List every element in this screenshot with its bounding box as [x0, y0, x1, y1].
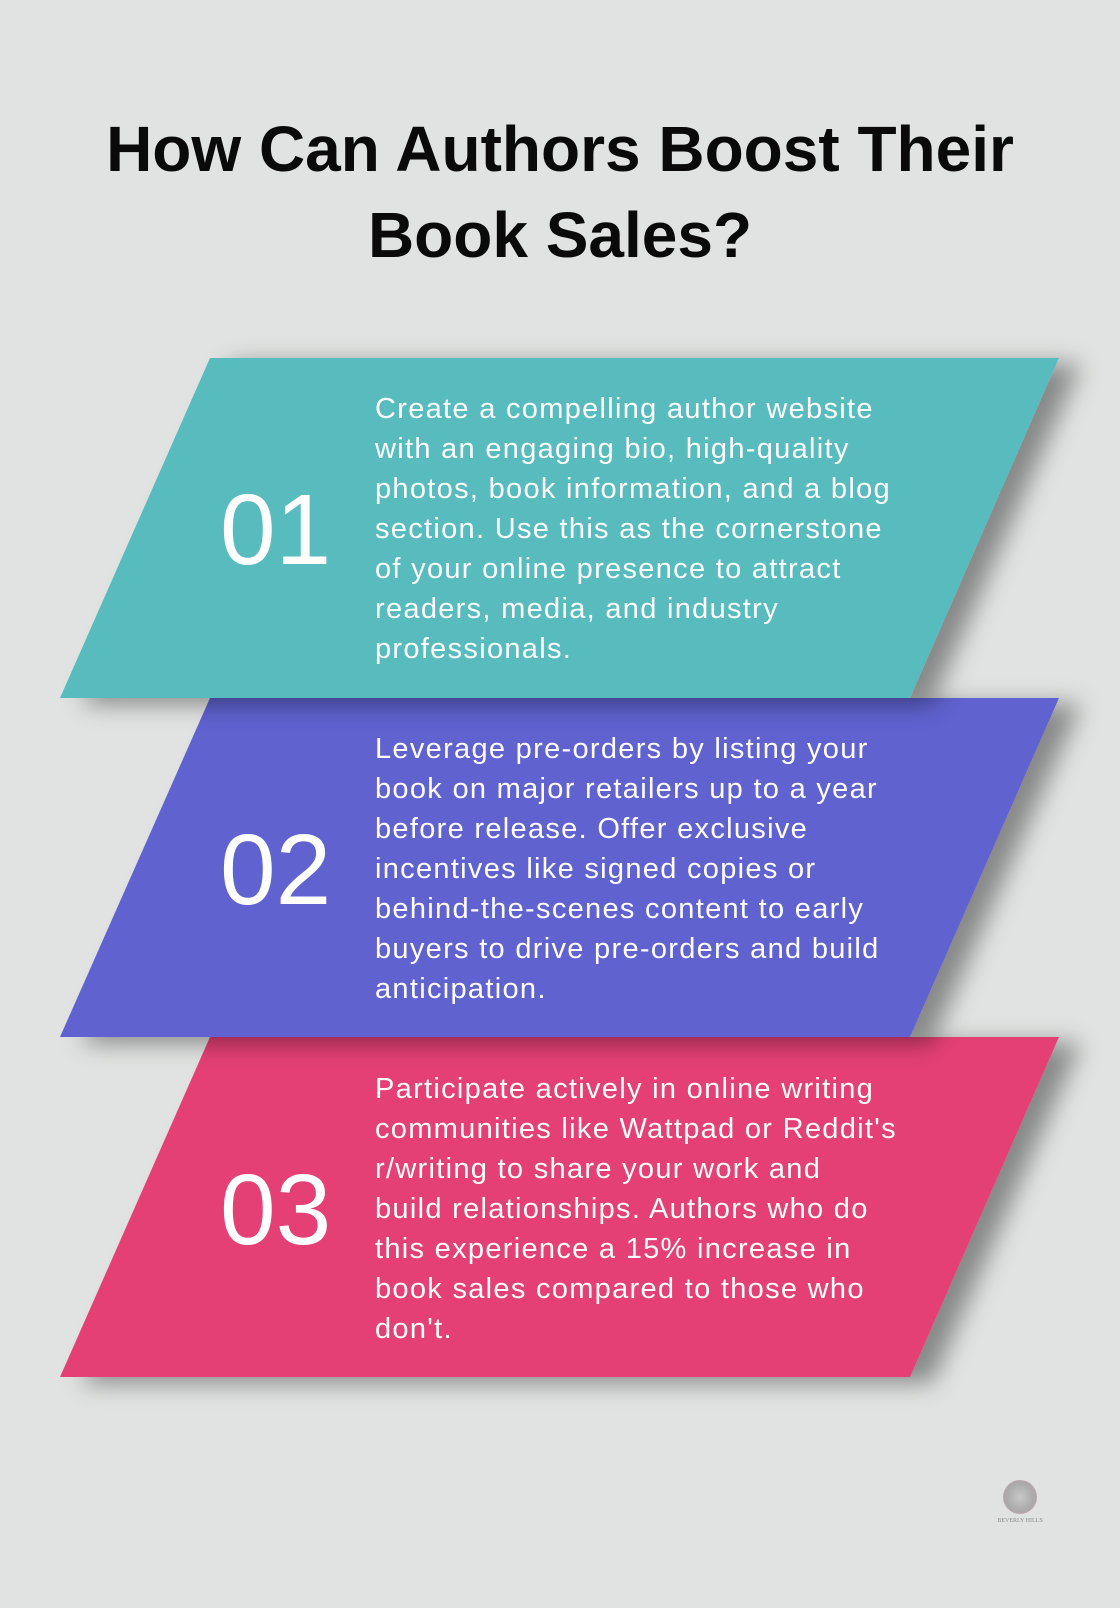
- text 1: Create a compelling author website: [375, 393, 874, 425]
- text 3: book sales compared to those who: [375, 1273, 865, 1305]
- text 3: r/writing to share your work and: [375, 1153, 821, 1185]
- text 2: book on major retailers up to a year: [375, 773, 878, 805]
- text 3: [375, 1073, 897, 1345]
- text 2: incentives like signed copies or: [375, 853, 816, 885]
- number 01: 01: [220, 474, 331, 586]
- number 02: 02: [220, 814, 331, 926]
- text 1: [375, 393, 891, 665]
- logo: BEVERLY HILLS: [997, 1518, 1043, 1524]
- text 1: readers, media, and industry: [375, 593, 779, 625]
- text 1: photos, book information, and a blog: [375, 473, 891, 505]
- number 03: 03: [220, 1154, 331, 1266]
- text 3: this experience a 15% increase in: [375, 1233, 852, 1265]
- title: [106, 113, 1014, 271]
- text 1: section. Use this as the cornerstone: [375, 513, 883, 545]
- text 2: anticipation.: [375, 973, 547, 1005]
- text 3: don't.: [375, 1313, 453, 1345]
- text 2: behind-the-scenes content to early: [375, 893, 864, 925]
- text 1: of your online presence to attract: [375, 553, 842, 585]
- title: How Can Authors Boost Their: [106, 113, 1014, 185]
- text 3: build relationships. Authors who do: [375, 1193, 869, 1225]
- text 3: Participate actively in online writing: [375, 1073, 874, 1105]
- text 2: Leverage pre-orders by listing your: [375, 733, 869, 765]
- text 1: with an engaging bio, high-quality: [375, 433, 850, 465]
- text 2: [375, 733, 880, 1005]
- title: Book Sales?: [368, 199, 752, 271]
- panel 3 shape: [60, 1037, 1059, 1377]
- text 3: communities like Wattpad or Reddit's: [375, 1113, 897, 1145]
- text 2: before release. Offer exclusive: [375, 813, 808, 845]
- logo: [997, 1480, 1043, 1524]
- panel 2 shape: [60, 698, 1059, 1037]
- text 2: buyers to drive pre-orders and build: [375, 933, 880, 965]
- text 1: professionals.: [375, 633, 572, 665]
- panel 1 shape: [60, 358, 1059, 698]
